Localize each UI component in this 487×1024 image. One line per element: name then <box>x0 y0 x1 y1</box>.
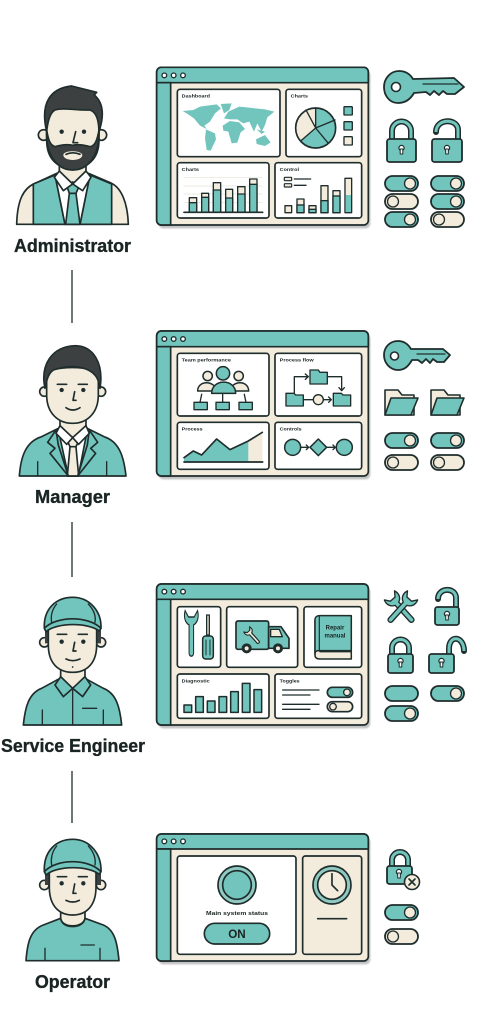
panel: team performance: Team performance <box>182 358 231 364</box>
icons: manager permissions <box>384 341 464 470</box>
person: service engineer <box>23 597 122 725</box>
toggles: service engineer <box>385 686 464 721</box>
panel: toggles <box>275 674 362 718</box>
icons: service engineer permissions <box>383 590 464 721</box>
icon: locked padlock <box>388 640 413 673</box>
panel: tools <box>177 607 221 667</box>
person: administrator <box>17 86 128 224</box>
icon: key groove <box>423 83 458 85</box>
toggles: operator <box>385 905 418 944</box>
panel: diagnostic bars: Diagnostic <box>182 678 210 684</box>
panel: process area chart <box>177 422 269 469</box>
icon: key <box>384 71 464 103</box>
window: manager dashboard <box>157 331 370 479</box>
window: operator dashboard <box>157 834 370 964</box>
window: service engineer dashboard <box>157 584 370 728</box>
panel: toggles: Toggles <box>280 678 300 684</box>
connector: manager to service engineer <box>71 522 73 577</box>
icon: folder <box>385 390 418 415</box>
label: operator: Operator <box>35 972 110 992</box>
panel: diagnostic bars <box>177 674 269 718</box>
label: service engineer: Service Engineer <box>1 736 145 756</box>
toggles: manager <box>385 433 464 470</box>
icon: restricted padlock <box>387 852 420 890</box>
panel: process flow <box>275 353 362 416</box>
icon: folder <box>431 390 464 415</box>
icon: key <box>384 341 450 370</box>
icon: locked padlock <box>387 122 416 162</box>
panel: team performance <box>177 353 269 416</box>
panel: repair manual: manual <box>325 633 346 639</box>
panel: bar chart: Charts <box>182 167 199 173</box>
panel: control <box>275 163 362 218</box>
panel: dashboard map: Dashboard <box>182 94 210 100</box>
panel: repair manual: Repair <box>326 625 345 631</box>
panel: bar chart <box>177 163 269 218</box>
panel: dashboard map <box>177 89 280 157</box>
icons: operator permissions <box>385 852 420 944</box>
icon: open padlock <box>432 121 462 162</box>
person: operator <box>26 839 119 961</box>
icon: key groove <box>417 353 445 355</box>
panel: pie chart <box>286 89 362 157</box>
connector: administrator to manager <box>71 270 73 323</box>
panel: main system status <box>177 856 296 954</box>
panel: controls: Controls <box>280 427 302 433</box>
panel: service truck <box>227 607 298 667</box>
panel: control: Control <box>280 167 300 173</box>
label: manager: Manager <box>35 487 110 507</box>
panel: pie chart: Charts <box>291 94 308 100</box>
icon: open padlock <box>435 590 459 625</box>
panel: process area chart: Process <box>182 427 203 433</box>
panel: repair manual <box>304 607 362 667</box>
panel: process flow: Process flow <box>280 358 314 364</box>
panel: controls <box>275 422 362 469</box>
connector: service engineer to operator <box>71 771 73 823</box>
person: manager <box>19 346 126 476</box>
icon: key hole <box>390 352 398 360</box>
icon: wide open padlock <box>429 639 464 673</box>
panel: main system status: Main system status <box>206 911 268 917</box>
panel: main system status: ON <box>228 928 246 941</box>
label: administrator: Administrator <box>14 236 131 256</box>
window: administrator dashboard <box>157 67 370 228</box>
panel: clock <box>303 856 362 954</box>
icon: crossed wrenches <box>383 590 419 627</box>
icon: key hole <box>392 82 400 92</box>
icons: administrator permissions <box>384 71 464 227</box>
toggles: administrator <box>385 176 464 227</box>
